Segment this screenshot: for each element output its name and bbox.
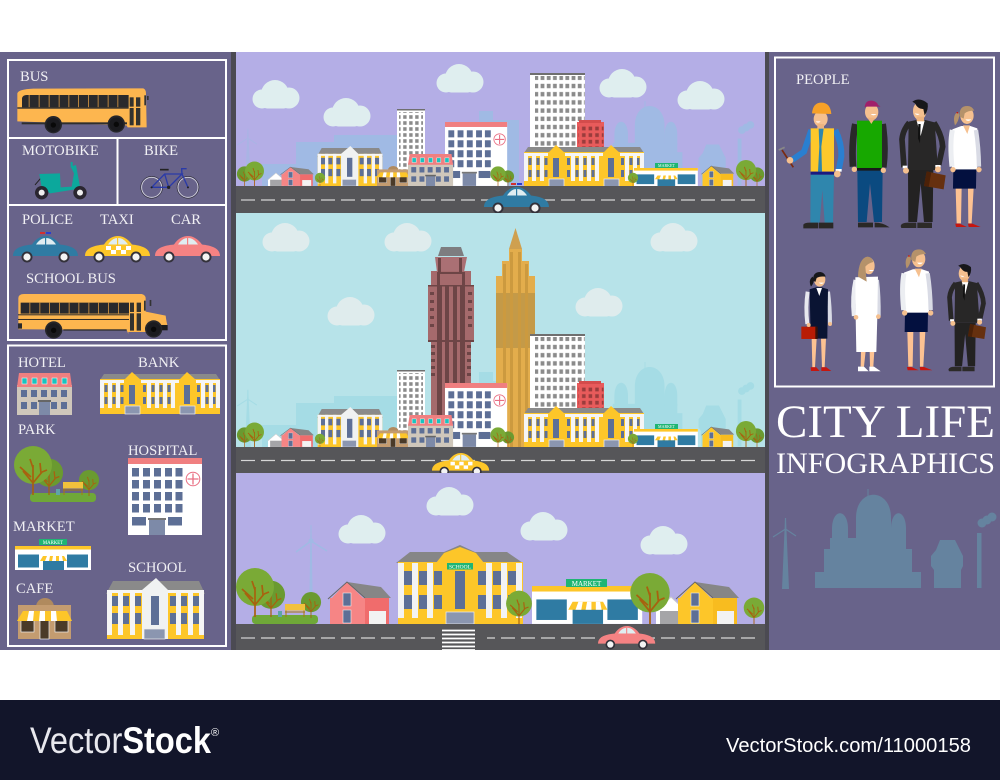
panel: top city scene [236,52,765,214]
gold skyscraper [496,228,535,451]
middle scene dividers and right panel background [231,52,1000,650]
heading: bike: BIKE [144,143,178,159]
heading: motobike: MOTOBIKE [22,143,99,159]
icon: bike [141,169,199,198]
figure: woman with red case [801,272,832,371]
footer bar [0,700,1000,780]
panel: bottom city scene [236,473,765,650]
title: city life: CITY LIFE [776,396,995,448]
background silhouettes [237,362,754,450]
figure: businesswoman in blouse [950,106,982,227]
school [396,545,523,624]
figure: man in green vest [852,101,890,227]
tree [506,591,532,624]
image id: VectorStock.com/11000158 [726,735,971,757]
figure: woman in blouse second [902,249,933,370]
clouds [262,223,698,326]
heading: hospital: HOSPITAL [128,443,197,459]
park [236,568,321,624]
tree [630,573,670,624]
panel: middle city scene [236,213,765,476]
icon: school bus [18,294,168,339]
city skyline [237,334,764,448]
city skyline [237,73,764,187]
heading: people: PEOPLE [796,72,850,88]
figure: businessman [901,100,946,228]
heading: hotel: HOTEL [18,355,66,371]
icon: police car [13,232,78,262]
heading: bank: BANK [138,355,180,371]
clouds [338,487,688,554]
icon: taxi on road [432,453,489,476]
heading: park: PARK [18,422,56,438]
figure: construction worker [779,103,842,228]
red house [328,582,391,624]
icon: bank [100,372,220,414]
icon: park [14,446,99,502]
icon: hospital [128,458,202,535]
icon: market: MARKET [43,541,63,546]
icon: car [155,236,220,262]
heading: bus: BUS [20,69,48,85]
icon: market [15,539,91,570]
icon: police car on road [484,183,549,214]
icon: motobike [35,162,87,199]
clouds [252,64,724,126]
icon: cafe [17,598,72,639]
heading: cafe: CAFE [16,581,53,597]
road [236,447,765,473]
city silhouette [773,489,996,589]
logo: VectorStock: VectorStock [30,720,211,761]
figure: man in suit second [948,264,986,371]
heading: school: SCHOOL [128,560,186,576]
school: SCHOOL [449,564,472,570]
heading: school bus: SCHOOL BUS [26,271,116,287]
heading: taxi: TAXI [100,212,134,228]
icon: school [106,578,205,639]
left panel background [0,52,231,650]
icon: taxi [85,236,150,262]
icon: hotel [17,373,72,415]
heading: car: CAR [171,212,201,228]
city skyline: MARKET [658,424,676,429]
city skyline: MARKET [658,163,676,168]
icon: pink car on road [598,626,655,649]
icon: bus [17,88,149,133]
subtitle: infographics: INFOGRAPHICS [776,447,995,480]
heading: market: MARKET [13,519,75,535]
panel: buildings [8,346,226,646]
panel: vehicles [8,60,226,340]
market: MARKET [572,580,602,588]
registered mark: ® [211,727,219,739]
market [532,579,642,624]
heading: police: POLICE [22,212,73,228]
brown skyscraper [428,247,474,451]
icon: windmill silhouette [296,525,327,624]
yellow house [676,582,739,624]
garage [655,597,687,624]
background silhouettes [237,101,754,189]
road [236,624,765,650]
figure: woman in white dress [853,257,881,371]
panel: people [775,58,994,386]
tree [744,598,764,624]
road [236,186,765,213]
